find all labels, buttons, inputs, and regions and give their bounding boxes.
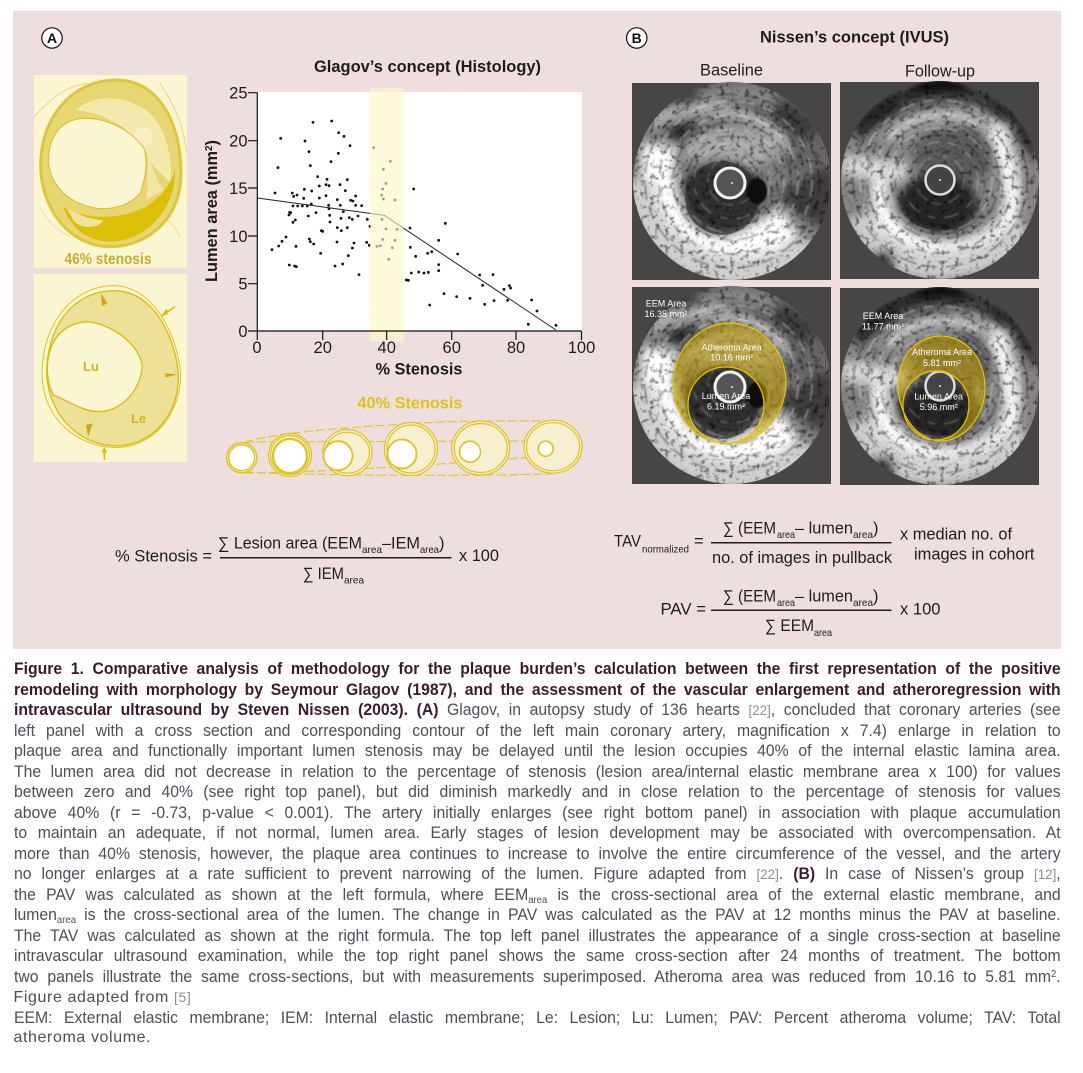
measurement labels: 16.35 mm² — [644, 309, 688, 319]
y axis tick labels: 25 — [229, 84, 248, 102]
formula: PAV — [660, 588, 940, 639]
formula: % stenosis: ∑ IEM — [303, 565, 344, 583]
formula: PAV: area — [853, 597, 873, 609]
y axis tick labels — [229, 84, 248, 341]
formula: normalized TAV: normalized — [642, 544, 689, 556]
formula: normalized TAV — [614, 520, 1035, 567]
measurement labels: Atheroma Area — [702, 342, 762, 352]
measurement labels: 6.19 mm² — [707, 402, 745, 412]
vessel 1 — [227, 443, 257, 473]
axes — [248, 92, 582, 340]
heading: 40% Stenosis: 40% Stenosis — [358, 394, 462, 412]
formula: normalized TAV: ∑ (EEM — [723, 520, 776, 538]
panel A badge: A — [47, 30, 57, 46]
x axis tick labels: 100 — [568, 339, 595, 357]
formula: % stenosis: –IEM — [382, 534, 420, 552]
measurement labels — [862, 311, 972, 412]
text: more than 40% stenosis, however, the plaque area continues to increase to involve the entire circumference of the vessel, and the artery — [14, 844, 1060, 862]
y axis title: Lumen area (mm — [203, 150, 221, 282]
IVUS image: baseline — [632, 82, 835, 280]
text: The lumen area did not decrease in relation to the percentage of stenosis (lesion area/internal elastic membrane area x 100) for values — [14, 762, 1060, 780]
measurement labels: Lumen Area — [702, 391, 750, 401]
x axis tick labels: 60 — [443, 339, 461, 357]
diagram: progression of six arterial cross sections — [227, 420, 582, 476]
text: two panels illustrate the same cross-sections, but with measurements superimposed. Atheroma area was reduced from 10.16 to 5.81 mm2. — [14, 968, 1060, 986]
label: Follow-up: Follow-up — [905, 62, 975, 80]
formula: % stenosis: area — [344, 574, 364, 586]
y axis title: ) — [203, 140, 221, 145]
x axis tick labels — [252, 339, 595, 357]
formula: PAV: area — [814, 627, 832, 639]
text: intravascular ultrasound examination, while the top right panel shows the same cross-section after 24 months of treatment. The bottom — [14, 947, 1060, 965]
text: no longer enlarges at a rate sufficient to prevent narrowing of the lumen. Figure adapted from [22]. (B) In case of Nissen’s group [12], — [14, 865, 1060, 883]
text: Figure adapted from [5] — [14, 989, 191, 1006]
panel B badge: B — [632, 30, 642, 46]
measurement labels: EEM Area — [646, 298, 686, 308]
photo: histology cross section, 46% stenosis: 46% stenosis — [64, 251, 152, 268]
figure caption — [14, 660, 1060, 1046]
text: plaque area and functionally important lumen stenosis may be delayed until the lesion occupies 40% of the internal elastic lamina area. — [14, 742, 1060, 760]
formula: normalized TAV: area — [777, 529, 795, 541]
text: The TAV was calculated as shown at the right formula. The top left panel illustrates the appearance of a single cross-section at baseline — [14, 926, 1060, 944]
measurement labels: 5.81 mm² — [923, 358, 961, 368]
regression line — [257, 198, 556, 330]
text: above 40% (r = -0.73, p-value < 0.001). The artery initially enlarges (see right bottom panel) in association with plaque accumulation — [14, 804, 1060, 822]
measurement labels: 10.16 mm² — [710, 352, 753, 362]
x axis title: % Stenosis — [376, 360, 462, 378]
x axis tick labels: 20 — [314, 339, 332, 357]
IVUS image: follow-up with measurements — [840, 282, 1040, 485]
40% stenosis highlight band — [370, 88, 404, 342]
formula: PAV: – lumen — [795, 588, 853, 606]
atheroma overlay — [898, 336, 985, 441]
formula: normalized TAV: x median no. of — [900, 526, 1012, 544]
formula: PAV: area — [777, 597, 795, 609]
formula: % stenosis: ∑ Lesion area (EEM — [218, 534, 362, 552]
formula: % stenosis: % Stenosis = — [115, 548, 212, 566]
text: between zero and 40% (see right top panel), but did diminish markedly and in close relation to the percentage of stenosis for values — [14, 783, 1060, 801]
formula: normalized TAV: no. of images in pullback — [712, 549, 893, 567]
vessel 6 — [524, 420, 582, 473]
formula: PAV: x 100 — [900, 600, 940, 618]
text: EEM: External elastic membrane; IEM: Internal elastic membrane; Le: Lesion; Lu: Lumen; PAV: Percent atheroma volume; TAV: Total — [14, 1008, 1060, 1026]
panel A badge — [42, 28, 62, 48]
x axis tick labels: 40 — [378, 339, 396, 357]
measurement labels: 5.96 mm² — [920, 402, 958, 412]
formula: % stenosis: area — [420, 544, 439, 556]
formula: normalized TAV: = — [694, 532, 704, 550]
y axis tick labels: 20 — [229, 132, 248, 150]
x axis tick labels: 80 — [507, 339, 525, 357]
measurement labels — [644, 298, 762, 412]
formula: % stenosis: x 100 — [459, 547, 499, 565]
text: remodeling with morphology by Seymour Glagov (1987), and the assessment of the vascular enlargement and atheroregression with — [14, 680, 1060, 698]
label: Baseline: Baseline — [700, 62, 763, 80]
y axis title: 2 — [204, 145, 215, 151]
atheroma overlay — [673, 323, 786, 443]
measurement labels: Lumen Area — [914, 392, 963, 402]
diagram: contour of artery with lumen and lesion — [34, 274, 187, 462]
y axis tick labels: 15 — [229, 180, 248, 198]
diagram: contour of artery with lumen and lesion: Lu — [83, 359, 99, 374]
formula: normalized TAV: TAV — [614, 532, 641, 550]
plot area — [257, 92, 582, 331]
text: Figure 1. Comparative analysis of methodology for the plaque burden’s calculation between the first representation of the positive — [14, 660, 1060, 678]
background panel — [13, 11, 1061, 649]
vessel 4 — [384, 422, 438, 476]
vessel 2 — [268, 434, 312, 476]
formula: % stenosis: area — [362, 544, 382, 556]
photo: histology cross section, 46% stenosis — [34, 75, 187, 268]
panel B badge — [626, 28, 647, 48]
heading: Nissen's concept: Nissen’s concept (IVUS) — [760, 28, 949, 46]
text: to maintain an adequate, if not normal, lumen area. Early stages of lesion development may be associated with overcompensation. At — [14, 824, 1060, 842]
formula: PAV: ) — [873, 588, 878, 606]
text: atheroma volume. — [14, 1029, 151, 1046]
text: left panel with a cross section and corresponding contour of the left main coronary artery, magnification x 7.4) enlarge in relation to — [14, 722, 1060, 740]
formula: normalized TAV: ) — [873, 520, 878, 538]
formula: % stenosis — [115, 534, 499, 586]
measurement labels: EEM Area — [863, 311, 903, 321]
y axis tick labels: 0 — [238, 323, 248, 341]
diagram: contour of artery with lumen and lesion: Le — [131, 411, 146, 426]
vessel 3 — [323, 430, 372, 476]
formula: normalized TAV: images in cohort — [914, 546, 1035, 564]
formula: normalized TAV: area — [853, 529, 873, 541]
text: intravascular ultrasound by Steven Nissen (2003). (A) Glagov, in autopsy study of 136 hearts [22], concluded that coronary arteries (see — [14, 701, 1060, 719]
vessel 5 — [452, 421, 510, 475]
heading: Glagov's concept: Glagov’s concept (Histology) — [314, 58, 541, 76]
IVUS image: baseline with measurements — [632, 286, 835, 484]
formula: normalized TAV: – lumen — [795, 520, 853, 538]
formula: PAV: PAV = — [660, 600, 706, 618]
measurement labels: 11.77 mm² — [862, 322, 904, 332]
x axis tick labels: 0 — [252, 339, 262, 357]
y axis tick labels: 5 — [238, 276, 248, 294]
formula: PAV: ∑ (EEM — [723, 588, 776, 606]
black data points — [271, 120, 557, 327]
scatter chart: lumen area vs % stenosis — [203, 84, 595, 378]
measurement labels: Atheroma Area — [912, 347, 972, 357]
IVUS image: follow-up — [840, 76, 1040, 279]
formula: % stenosis: ) — [439, 534, 444, 552]
y axis tick labels: 10 — [229, 228, 248, 246]
formula: PAV: ∑ EEM — [765, 617, 814, 635]
